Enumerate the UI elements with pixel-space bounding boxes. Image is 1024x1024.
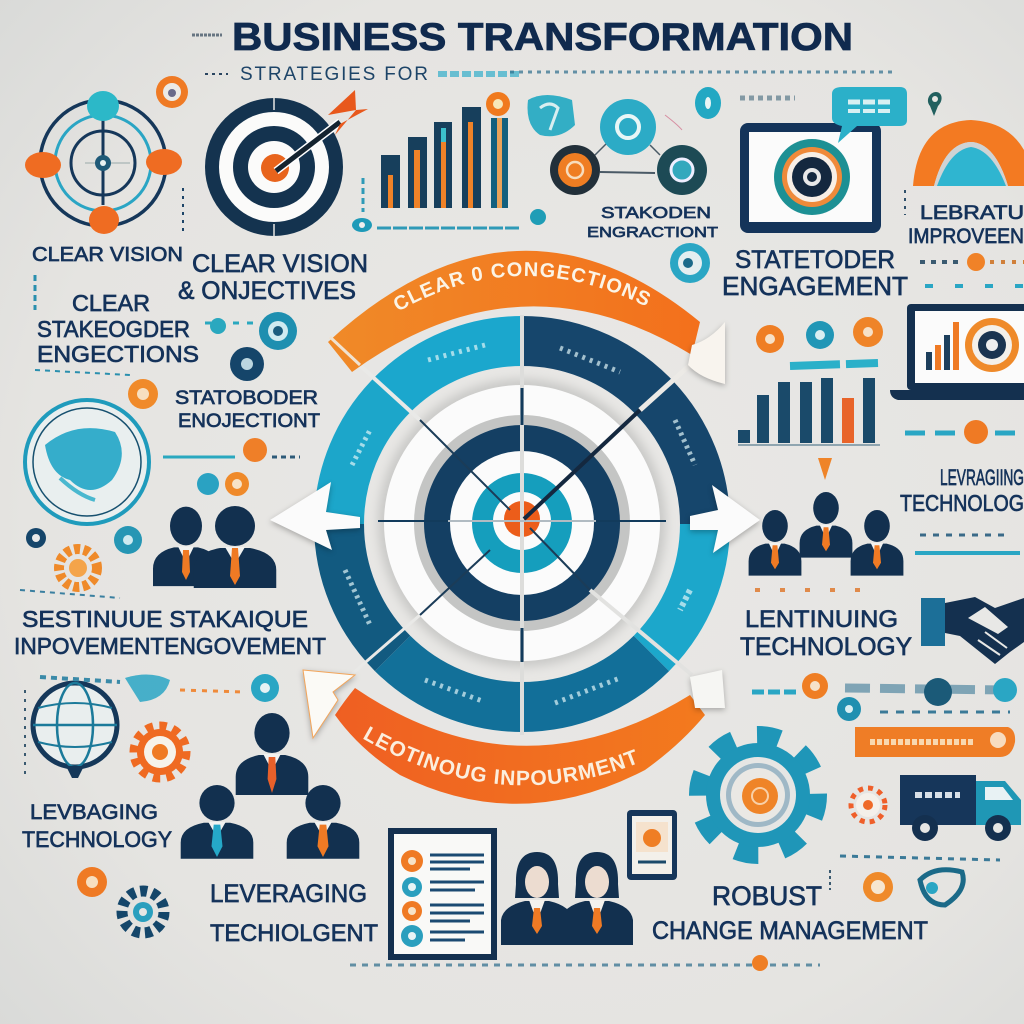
- arrowhead: left: [270, 482, 360, 550]
- banner: bottom orange arc: [335, 688, 705, 804]
- icon: orange gear left: [135, 727, 185, 777]
- label: leveraging technology bottom: TECHIOLGENT: [210, 920, 378, 947]
- arrow: upper right shaft: [640, 365, 690, 410]
- label: stakeholder connection: STATOBODER: [175, 388, 318, 409]
- small icons: left gear row: [20, 526, 142, 598]
- bar chart: rising bars: [352, 92, 520, 232]
- subtitle: STRATEGIES FOR: [240, 64, 428, 85]
- label: continuing technology: LENTINUING: [745, 606, 898, 633]
- rings: [378, 379, 666, 667]
- banner: top orange arc: [328, 250, 700, 372]
- label: clear vision and objectives: & ONJECTIVES: [178, 277, 356, 305]
- label: continuing technology: TECHNOLOGY: [740, 633, 912, 661]
- label: stakeholder engagement small: STAKODEN: [601, 205, 711, 222]
- arrow: lower left shaft: [345, 615, 420, 680]
- label: continuing stakeholder engagement: SESTINUUE STAKAIQUE: [22, 606, 308, 632]
- icon: handshake: [921, 597, 1024, 664]
- label: stakeholder engagement small: ENGRACTIONT: [587, 224, 718, 241]
- arrow: upper left: [332, 340, 510, 510]
- icon: phone card: [627, 810, 677, 880]
- icon: globe balloon: [33, 683, 117, 778]
- label: stakeholder connection: [175, 388, 320, 432]
- label: continuing stakeholder engagement: INPOVEMENTENGOVEMENT: [14, 633, 326, 659]
- people: two women: [501, 852, 633, 945]
- label: stakeholder engagement large: [722, 246, 908, 301]
- label: clear stakeholder engagement: CLEAR: [72, 290, 150, 316]
- label: clear stakeholder engagement: ENGECTIONS: [37, 341, 199, 367]
- banner: orange tag: [855, 727, 1015, 757]
- arrowhead: lower right: [690, 670, 725, 708]
- label: leveraging technology right: [900, 465, 1024, 516]
- icon: tablet with target and speech bubble: [740, 87, 907, 233]
- label: stakeholder connection: ENOJECTIONT: [178, 411, 320, 432]
- label: robust change management: ROBUST: [712, 881, 822, 911]
- outer ring segments: [339, 341, 705, 707]
- arrow: upper right inner: [524, 410, 640, 519]
- banner: bottom orange arc: LEOTINOUG INPOURMENT: [363, 726, 635, 786]
- people: right trio: [749, 492, 903, 576]
- label: leveraging technology bottom: LEVERAGING: [210, 880, 367, 908]
- icon: checklist document: [388, 828, 497, 960]
- icon: orange gear small: [851, 788, 885, 822]
- icon: globe ring: [25, 400, 149, 524]
- small marks below people: [755, 535, 1020, 590]
- small icons: left column: [35, 275, 300, 496]
- small dashes: right of label: [920, 253, 1024, 286]
- arrowhead: upper right: [688, 322, 725, 384]
- label: robust change management: [652, 881, 928, 945]
- label: leveraging technology bottom: [210, 880, 378, 947]
- icon: delivery truck: [900, 775, 1021, 841]
- small icon: teal ring badge: [670, 243, 710, 283]
- label: leverage improvement: [908, 203, 1024, 248]
- label: robust change management: CHANGE MANAGEMENT: [652, 917, 928, 945]
- banner: top orange arc: CLEAR 0 CONGECTIONS: [394, 262, 650, 310]
- icon: stakeholder network: [528, 87, 795, 225]
- arrowhead: lower left: [303, 670, 355, 738]
- label: clear vision and objectives: [178, 250, 368, 305]
- label: leveraging technology left: [22, 801, 172, 852]
- people: left pair: [153, 506, 276, 588]
- label: clear stakeholder engagement: STAKEOGDER: [37, 316, 190, 342]
- label: leveraging technology left: LEVBAGING: [30, 801, 158, 824]
- label: stakeholder engagement small: [587, 205, 718, 241]
- central target: [332, 315, 705, 735]
- label: continuing technology: [740, 606, 912, 661]
- icon: teal gear: [703, 740, 813, 850]
- label: leverage improvement: LEBRATU: [920, 203, 1024, 224]
- arrow: lower left inner: [420, 550, 490, 615]
- label: clear vision small: CLEAR VISION: [32, 244, 183, 266]
- cross dividers: [520, 315, 524, 735]
- small icons: bottom left gears: [77, 867, 164, 933]
- icon: laptop: [890, 304, 1024, 400]
- small icons: lower left row: [25, 674, 279, 780]
- people: three lower left: [181, 713, 359, 859]
- title: BUSINESS TRANSFORMATION: [232, 16, 853, 59]
- label: clear vision and objectives: CLEAR VISION: [192, 250, 368, 278]
- arrow: lower right shaft: [590, 590, 692, 675]
- label: clear stakeholder engagement: [37, 290, 199, 367]
- icon: vision ring with nodes: [25, 76, 188, 236]
- label: leveraging technology left: TECHNOLOGY: [22, 827, 172, 852]
- small icons: right row above banner: [752, 673, 1017, 721]
- label: stakeholder engagement large: ENGAGEMENT: [722, 271, 908, 301]
- icon: bullseye target with arrow: [205, 90, 368, 236]
- small icons: lower right: [830, 856, 1000, 905]
- label: stakeholder engagement large: STATETODER: [735, 246, 895, 274]
- bar chart: right: [738, 317, 1024, 480]
- arrowhead: right: [690, 485, 760, 553]
- icon: orange arch with teal dome: [905, 92, 1024, 215]
- label: continuing stakeholder engagement: [14, 606, 326, 659]
- blurred ring captions: [345, 345, 695, 703]
- dotted footer strip: [350, 955, 820, 971]
- arrow: lower right inner: [530, 528, 590, 590]
